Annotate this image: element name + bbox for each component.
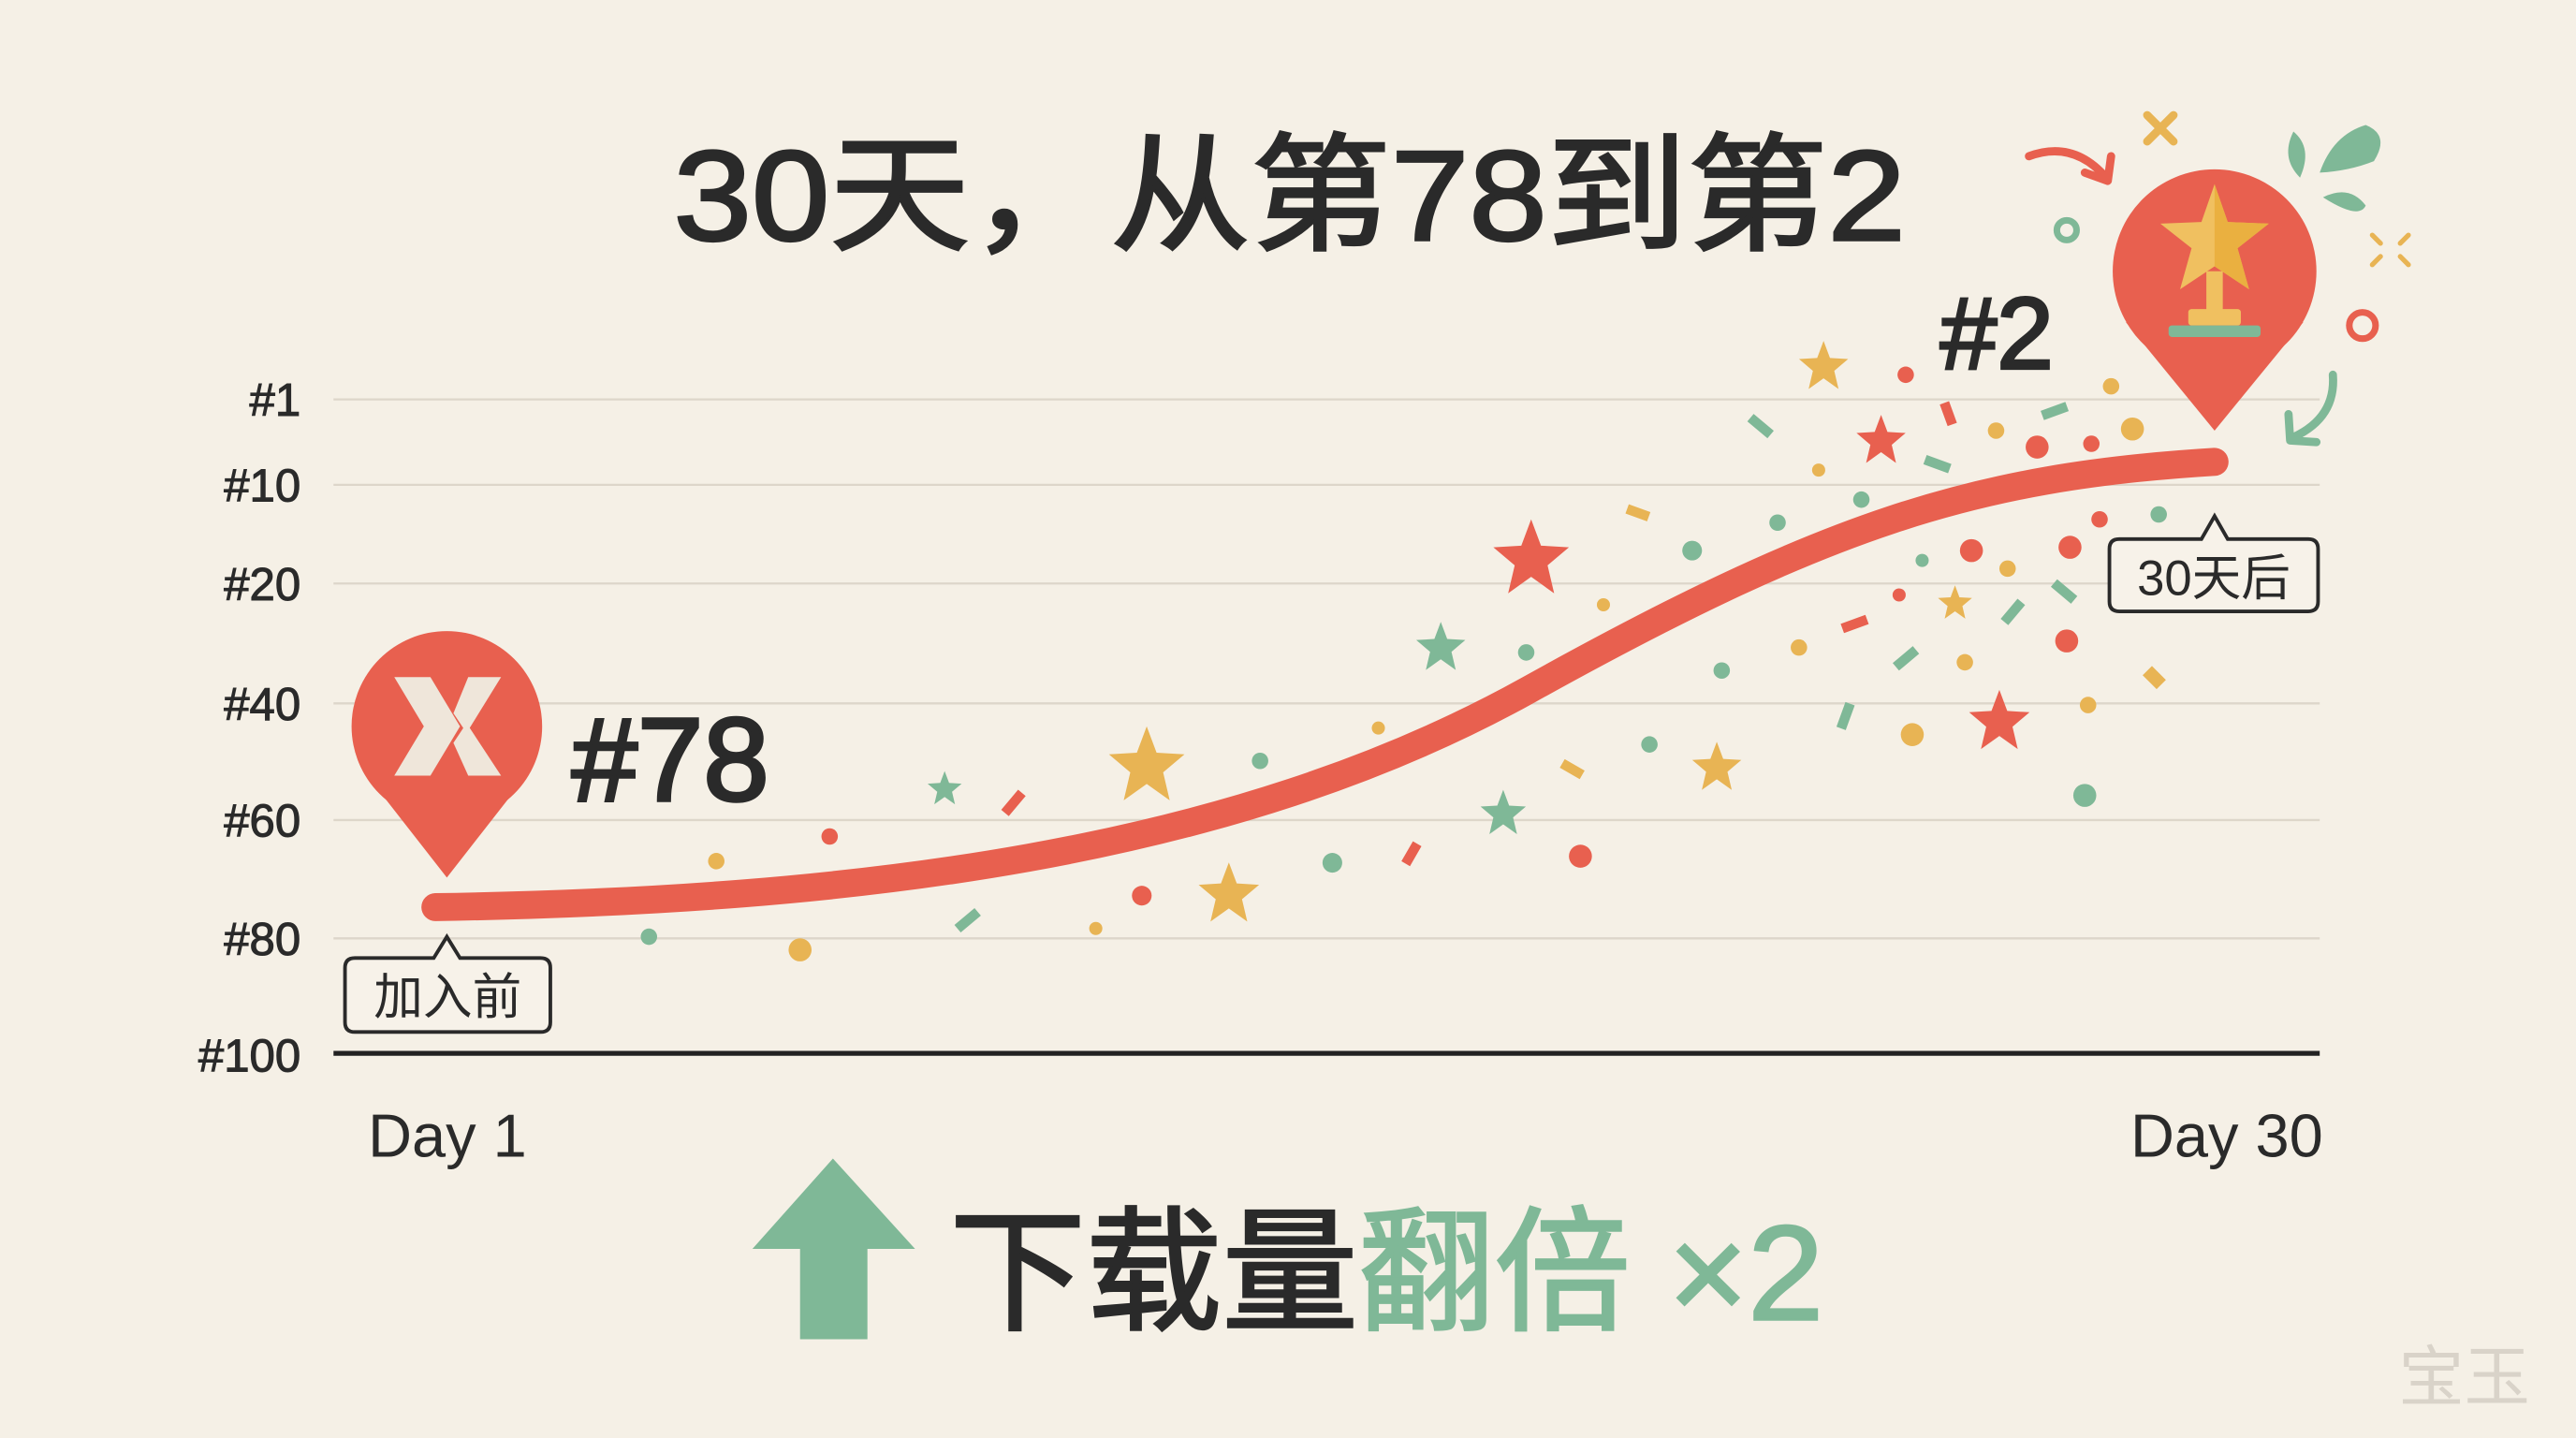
rank #78: #78 <box>572 694 769 826</box>
x axis labels <box>368 1102 2323 1170</box>
icon: trophy pin <box>2113 169 2317 431</box>
x axis labels: Day 1 <box>368 1102 527 1170</box>
rank #2: #2 <box>1940 276 2054 390</box>
icon: start pin <box>352 631 542 877</box>
watermark: 宝玉 <box>2398 1340 2530 1414</box>
callout: 30天后: 30天后 <box>2137 550 2291 606</box>
icon: up arrow <box>753 1158 915 1340</box>
y axis labels: #10 <box>224 461 300 511</box>
x axis <box>333 1052 2320 1055</box>
y axis labels: #40 <box>224 680 300 730</box>
headline: downloads doubled: 下载量翻倍 ×2 <box>949 1198 1823 1348</box>
celebration decorations <box>2029 115 2408 442</box>
y axis labels: #20 <box>224 560 300 610</box>
x axis labels: Day 30 <box>2130 1102 2323 1170</box>
callout: 30天后 <box>2110 516 2318 611</box>
title: 30天，从第78到第2 <box>674 125 1906 268</box>
y axis labels: #60 <box>224 796 300 846</box>
rank curve <box>435 462 2215 907</box>
y axis labels: #100 <box>198 1031 300 1081</box>
y axis labels: #1 <box>250 375 300 426</box>
y axis labels <box>198 375 300 1081</box>
y axis labels: #80 <box>224 915 300 965</box>
callout: 加入前 <box>345 937 550 1032</box>
stars <box>928 341 2029 921</box>
confetti <box>640 367 2167 961</box>
callout: 加入前: 加入前 <box>373 970 521 1025</box>
